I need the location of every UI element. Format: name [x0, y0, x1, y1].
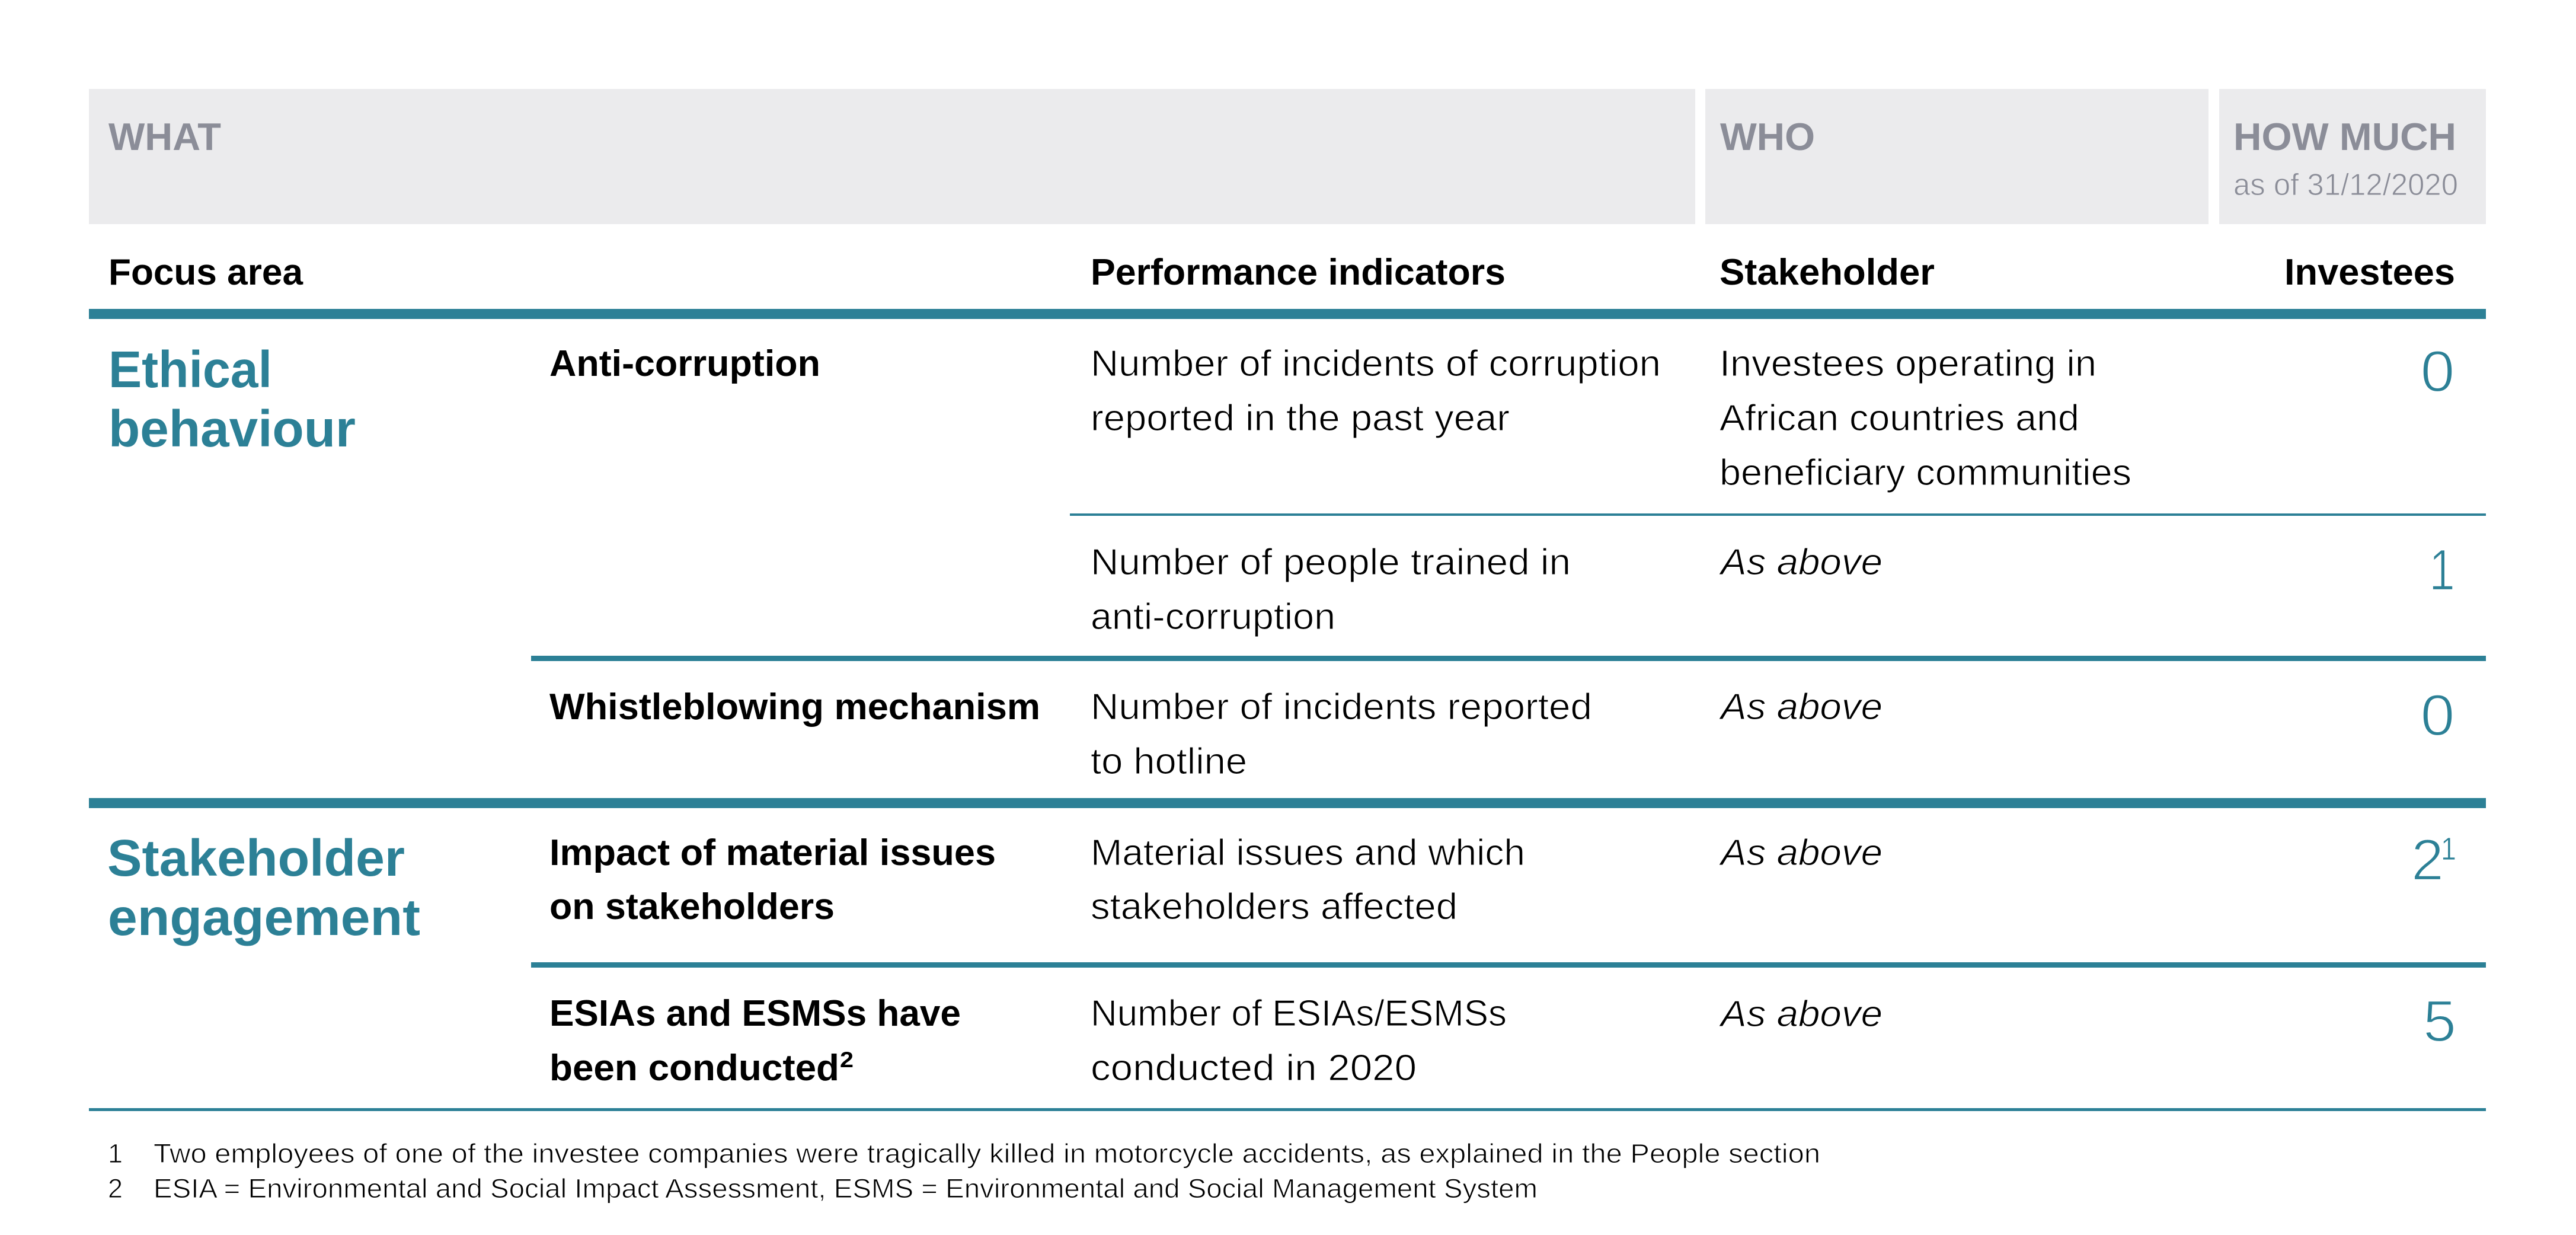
focus area heading: ethical behaviour: behaviour [108, 400, 356, 458]
column headings: Stakeholder [1720, 252, 1935, 293]
section: stakeholder engagement [107, 827, 2456, 1089]
topic: impact of material issues: Impact of material issues [549, 832, 996, 873]
stakeholder: investees and communities: Investees operating in [1720, 343, 2096, 384]
indicator: hotline incidents: to hotline [1091, 741, 1247, 782]
focus area heading: ethical behaviour [108, 341, 356, 458]
indicator: esias conducted: conducted in 2020 [1091, 1048, 1417, 1089]
indicator: people trained [1091, 542, 1571, 637]
stakeholder: as above: As above [1718, 832, 1883, 873]
topic: esias and esmss: ESIAs and ESMSs have [549, 993, 961, 1034]
indicator: esias conducted: Number of ESIAs/ESMSs [1091, 993, 1507, 1034]
indicator: material issues [1091, 832, 1525, 927]
topic: anti-corruption: Anti-corruption [549, 343, 820, 384]
stakeholder: investees and communities [1720, 343, 2131, 493]
indicator: incidents of corruption: Number of incidents of corruption [1091, 343, 1661, 384]
value: 5: 5 [2423, 988, 2456, 1054]
stakeholder: investees and communities: beneficiary communities [1720, 452, 2131, 493]
header band: how much: as of 31/12/2020 [2233, 168, 2458, 202]
topic: impact of material issues [549, 832, 996, 927]
header band: what [89, 89, 1695, 224]
stakeholder: as above: As above [1718, 687, 1883, 727]
header band: how much: HOW MUCH [2233, 115, 2456, 158]
footnotes: ESIA = Environmental and Social Impact Assessment, ESMS = Environmental and Social Management System [154, 1173, 1538, 1204]
topic: impact of material issues: on stakeholders [549, 886, 835, 927]
header band: how much [2219, 89, 2486, 224]
value: 0: 0 [2421, 339, 2455, 404]
stakeholder: as above: As above [1718, 994, 1883, 1035]
footnotes: 1 [108, 1138, 123, 1169]
indicator: hotline incidents [1091, 687, 1592, 782]
indicator: incidents of corruption [1091, 343, 1661, 439]
focus area heading: stakeholder engagement: engagement [108, 889, 420, 946]
indicator: hotline incidents: Number of incidents reported [1091, 687, 1592, 727]
footnotes: 2 [108, 1173, 123, 1204]
stakeholder: investees and communities: African countries and [1720, 398, 2079, 439]
column headings: Focus area [108, 252, 303, 293]
value: 2 with footnote 1: 1 [2441, 831, 2456, 867]
focus area heading: stakeholder engagement [107, 829, 420, 946]
section: ethical behaviour [108, 339, 2455, 782]
footnotes: Two employees of one of the investee companies were tragically killed in motorcycle accidents, as explained in the People section [154, 1138, 1820, 1169]
indicator: esias conducted [1091, 993, 1507, 1089]
header band: who: WHO [1720, 115, 1815, 158]
indicator: incidents of corruption: reported in the past year [1091, 398, 1510, 439]
topic: esias and esmss: 2 [840, 1048, 854, 1072]
header band: who [1705, 89, 2209, 224]
indicator: people trained: Number of people trained in [1091, 542, 1571, 583]
focus area heading: ethical behaviour: Ethical [108, 341, 272, 398]
indicator: people trained: anti-corruption [1091, 596, 1335, 637]
topic: whistleblowing mechanism: Whistleblowing mechanism [549, 687, 1040, 727]
footnotes [108, 1138, 1820, 1204]
column headings [108, 252, 2455, 293]
value: 1: 1 [2429, 537, 2455, 602]
indicator: material issues: Material issues and which [1091, 832, 1525, 873]
value: 2 with footnote 1: 2 [2411, 827, 2444, 892]
topic: esias and esmss [549, 993, 961, 1089]
stakeholder: as above: As above [1718, 542, 1883, 583]
focus area heading: stakeholder engagement: Stakeholder [107, 829, 405, 887]
indicator: material issues: stakeholders affected [1091, 886, 1458, 927]
value: 0: 0 [2421, 682, 2455, 748]
column headings: Investees [2284, 252, 2455, 293]
topic: esias and esmss: been conducted [549, 1048, 839, 1089]
column headings: Performance indicators [1091, 252, 1506, 293]
header band: what: WHAT [108, 115, 221, 158]
table rules [89, 309, 2486, 1111]
